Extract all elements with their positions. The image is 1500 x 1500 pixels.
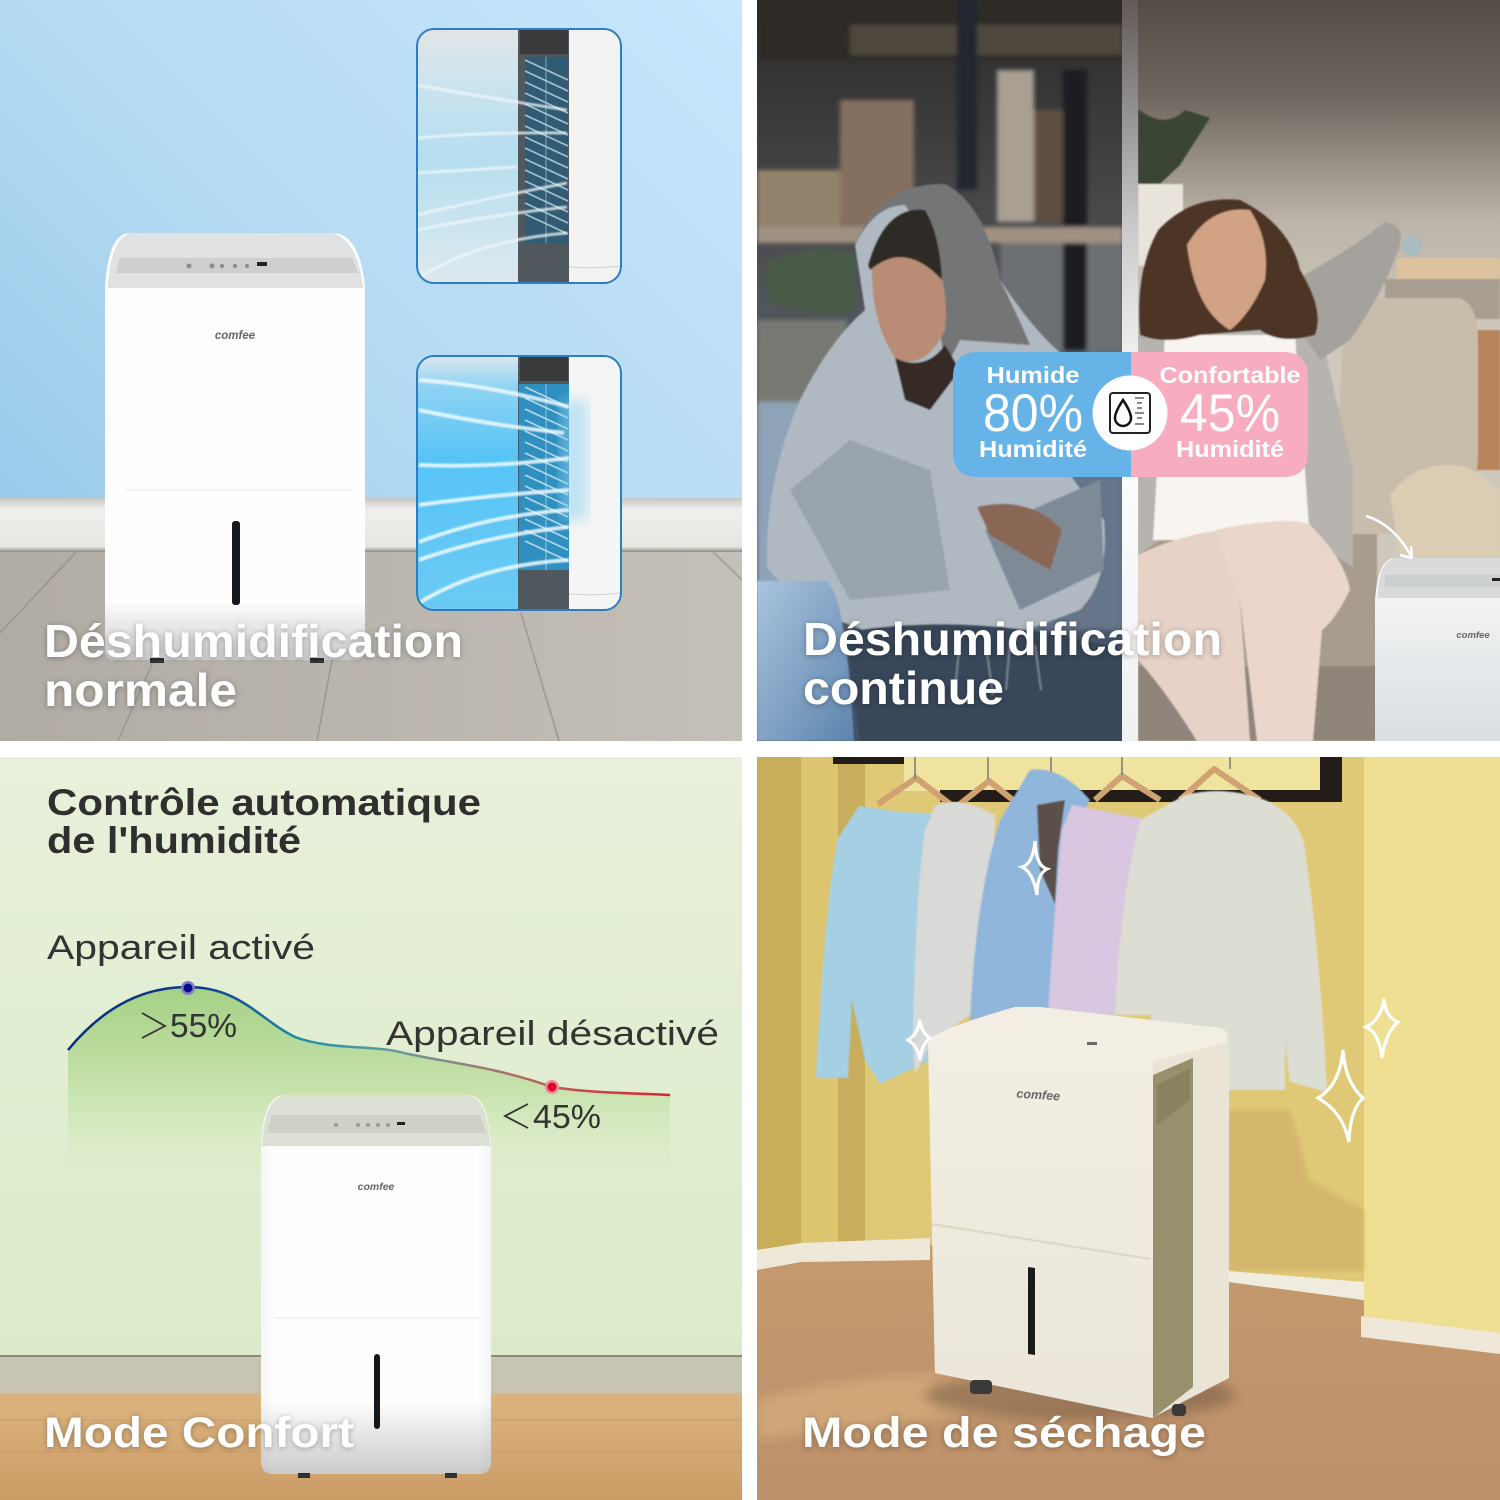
heading: continuous dehumidification: Déshumidification [803,613,1222,665]
icon: humidity drop [1092,376,1168,450]
icon: dehumidifier front view [105,233,365,663]
heading: automatic humidity control: Contrôle automatique [47,782,481,823]
badge: humidity comparison: 80% [983,384,1083,443]
badge: humidity comparison: Humidité [979,436,1087,462]
badge: humidity comparison [953,352,1308,477]
icon: dehumidifier front view: comfee [215,330,256,342]
icon: dehumidifier on right: comfee [1456,630,1490,641]
icon: dehumidifier on right [1366,516,1500,741]
icon: dehumidifier: comfee [358,1181,395,1193]
icon: sparkles [908,841,1398,1142]
illustration: woman under blanket [757,184,1123,741]
heading: continuous dehumidification: continue [803,662,1004,714]
panel: drying mode [757,757,1500,1500]
icon: dehumidifier 3/4 view [925,1007,1235,1420]
illustration: hanging clothes [816,757,1327,1092]
chart: humidity curve: 55% [170,1007,237,1044]
badge: humidity comparison: 45% [1180,384,1280,443]
heading: normal dehumidification: Déshumidification [44,615,463,667]
shelves background [757,0,1123,630]
label: device on: Appareil activé [47,929,315,967]
panel: normal dehumidification [0,0,742,741]
divider strip [1122,0,1138,741]
panel: continuous dehumidification [757,0,1500,741]
illustration: relaxed woman on sofa [1138,109,1500,741]
baseboards [757,1238,930,1270]
heading: comfort mode: Mode Confort [44,1409,354,1457]
back wall [865,757,1364,1301]
heading: drying mode: Mode de séchage [802,1409,1206,1457]
badge: humidity comparison: Humide [986,362,1080,388]
inset: weak airflow [417,29,621,283]
label: device off: Appareil désactivé [386,1015,719,1053]
heading: normal dehumidification: normale [44,664,237,716]
badge: humidity comparison: Humidité [1176,436,1284,462]
icon: dehumidifier 3/4 view: comfee [1016,1086,1061,1104]
inset: strong airflow [417,356,621,610]
heading: automatic humidity control: de l'humidité [47,820,301,861]
panel: comfort mode [0,757,742,1500]
chart: humidity curve: 45% [533,1098,601,1135]
mirror frame rail [833,757,1342,802]
badge: humidity comparison: Confortable [1160,362,1300,388]
icon: dehumidifier [261,1095,491,1478]
chart: humidity curve [67,981,670,1140]
